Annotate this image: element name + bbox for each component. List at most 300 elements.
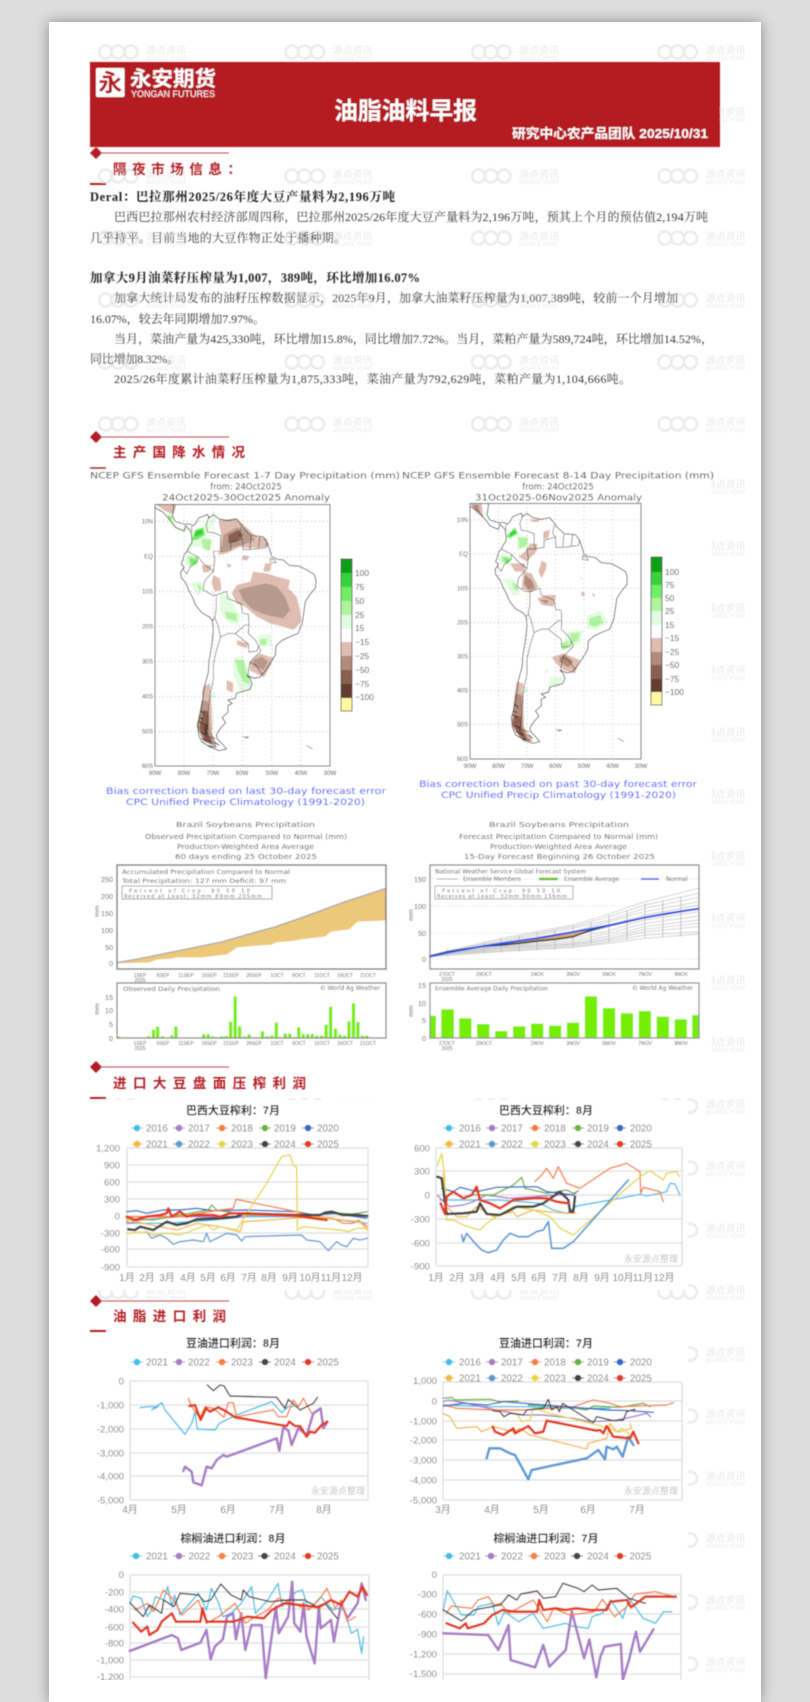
legend: 2017 bbox=[188, 1124, 210, 1134]
icon: Yongan logo: 永 bbox=[98, 70, 122, 97]
text block: Canada canola crush: 2025/26年度累计油菜籽压榨量为1,875,333吨，菜油产量为792,629吨，菜粕产量为1,104,666吨。 bbox=[114, 371, 631, 386]
plot: 11月 bbox=[321, 1272, 341, 1284]
chart title: 棕榈油进口利润：8月 bbox=[180, 1531, 286, 1545]
colour legend: −100 bbox=[665, 687, 684, 697]
chart: map 8-14 day precipitation anomaly bbox=[402, 470, 714, 800]
plot: -5,000 bbox=[97, 1496, 124, 1506]
legend: 2025 bbox=[317, 1140, 339, 1150]
text block: Canada canola crush: 当月，菜油产量为425,330吨，环比增加15.8%，同比增加7.72%。当月，菜粕产量为589,724吨，环比增加14.52%， bbox=[114, 331, 713, 346]
plot: 5月 bbox=[171, 1504, 187, 1516]
ensemble lines: 3NOV bbox=[566, 972, 580, 978]
chart: palm oil import margin August bbox=[97, 1531, 369, 1683]
daily bars: 5NOV bbox=[602, 1041, 616, 1047]
plot: 3月 bbox=[435, 1504, 451, 1516]
company name: YONGAN FUTURES bbox=[131, 89, 215, 99]
plot: -2,000 bbox=[410, 1436, 437, 1446]
legend: 2018 bbox=[544, 1124, 566, 1134]
plot: -1,500 bbox=[410, 1669, 437, 1680]
legend: 2025 bbox=[630, 1552, 652, 1562]
daily bars: 11SEP bbox=[178, 1041, 194, 1047]
chart title: 豆油进口利润：7月 bbox=[499, 1336, 593, 1350]
legend: 2016 bbox=[459, 1124, 481, 1134]
text block: Deral Parana soybean: Deral：巴拉那州2025/26年度大豆产量料为2,196万吨 bbox=[90, 189, 395, 204]
daily bars: 16OCT bbox=[337, 1041, 353, 1047]
legend: 2023 bbox=[232, 1552, 254, 1562]
accumulated area: 150 bbox=[101, 909, 113, 918]
colour legend bbox=[651, 557, 684, 705]
chart: map 1-7 day precipitation anomaly bbox=[90, 470, 400, 807]
accumulated area: Total Precipitation: 127 mm Deficit: 97 mm bbox=[121, 878, 286, 885]
plot: -600 bbox=[101, 1244, 120, 1256]
axis labels: EQ bbox=[144, 554, 153, 560]
legend bbox=[131, 1124, 339, 1150]
axis labels: 30W bbox=[324, 770, 337, 777]
chart: soybean oil import margin July bbox=[410, 1336, 682, 1516]
plot: -1,000 bbox=[410, 1416, 437, 1428]
chart titles bbox=[459, 820, 658, 861]
map title: 24Oct2025-30Oct2025 Anomaly bbox=[162, 492, 330, 502]
plot: 永安源点整理 bbox=[624, 1253, 678, 1264]
section heading: overnight market news: 隔夜市场信息： bbox=[113, 161, 241, 177]
ensemble lines: National Weather Service Global Forecast System bbox=[435, 868, 586, 876]
plot: -2,000 bbox=[97, 1424, 124, 1436]
daily bars: 26SEP bbox=[246, 1041, 262, 1047]
axis labels: 90W bbox=[464, 763, 477, 770]
accumulated area: 2025 bbox=[134, 978, 146, 984]
colour legend: 50 bbox=[355, 596, 365, 606]
daily bars: 7NOV bbox=[638, 1041, 652, 1047]
legend: 2023 bbox=[231, 1140, 253, 1150]
ensemble lines: 5NOV bbox=[602, 972, 616, 978]
accumulated area: Percent of Crop: 90 50 10 bbox=[129, 888, 250, 894]
plot: -900 bbox=[101, 1262, 120, 1274]
daily bars: 15 bbox=[418, 981, 426, 990]
map title: NCEP GFS Ensemble Forecast 1-7 Day Precipitation (mm) bbox=[90, 470, 400, 480]
axis labels: 40S bbox=[142, 694, 153, 700]
axis labels: 10N bbox=[457, 517, 468, 524]
colour legend: −15 bbox=[665, 633, 680, 643]
legend bbox=[130, 1552, 339, 1562]
plot: -800 bbox=[105, 1638, 124, 1650]
legend: 2022 bbox=[188, 1358, 210, 1368]
plot: 600 bbox=[414, 1144, 430, 1154]
accumulated area: 6SEP bbox=[157, 973, 170, 979]
daily bars bbox=[94, 983, 386, 1052]
map title: 31Oct2025-06Nov2025 Anomaly bbox=[475, 492, 642, 502]
map title: from: 24Oct2025 bbox=[210, 482, 282, 492]
plot: -200 bbox=[105, 1588, 124, 1598]
text block: Canada canola crush: 加拿大9月油菜籽压榨量为1,007，389吨，环比增加16.07% bbox=[90, 270, 420, 285]
plot: 5月 bbox=[200, 1272, 216, 1284]
daily bars: 5 bbox=[422, 1016, 426, 1025]
daily bars: 21OCT bbox=[360, 1041, 376, 1047]
axis labels: 30S bbox=[457, 654, 468, 660]
plot: 9月 bbox=[282, 1272, 298, 1284]
plot: 0 bbox=[119, 1570, 124, 1581]
plot: 永安源点整理 bbox=[311, 1485, 365, 1496]
plot: 1,200 bbox=[96, 1144, 120, 1154]
plot: -600 bbox=[411, 1238, 430, 1250]
axis labels: EQ bbox=[459, 551, 468, 558]
text block: Canada canola crush: 16.07%，较去年同期增加7.97%。 bbox=[90, 311, 265, 326]
legend: 2025 bbox=[317, 1552, 339, 1562]
accumulated area: 16SEP bbox=[201, 973, 217, 979]
axis labels: 60S bbox=[457, 756, 468, 763]
plot: 4月 bbox=[180, 1272, 196, 1284]
plot: 0 bbox=[119, 1376, 124, 1388]
chart title: 巴西大豆榨利：8月 bbox=[499, 1103, 593, 1117]
chart titles: Production-Weighted Area Average bbox=[490, 842, 628, 851]
daily bars: © World Ag Weather bbox=[320, 985, 381, 992]
plot: -1,200 bbox=[410, 1650, 437, 1660]
section heading: precipitation: 主产国降水情况 bbox=[113, 444, 246, 460]
plot: 4月 bbox=[122, 1504, 138, 1516]
text block: Canada canola crush: 同比增加8.32%。 bbox=[90, 351, 179, 366]
map title bbox=[402, 470, 714, 502]
plot: 900 bbox=[104, 1160, 120, 1172]
ensemble lines: 150 bbox=[414, 875, 426, 884]
legend: 2018 bbox=[544, 1358, 566, 1368]
map title: NCEP GFS Ensemble Forecast 8-14 Day Precipitation (mm) bbox=[402, 470, 714, 480]
colour legend: 25 bbox=[355, 610, 365, 620]
legend: 2023 bbox=[544, 1140, 566, 1150]
plot bbox=[96, 1144, 368, 1284]
chart titles: Observed Precipitation Compared to Normal (mm) bbox=[145, 832, 347, 841]
map title bbox=[90, 470, 400, 502]
plot bbox=[97, 1570, 369, 1683]
legend: 2024 bbox=[587, 1140, 609, 1150]
chart titles: Brazil Soybeans Precipitation bbox=[176, 820, 315, 829]
legend: 2022 bbox=[188, 1552, 210, 1562]
daily bars: 2025 bbox=[441, 1046, 453, 1052]
map note: CPC Unified Precip Climatology (1991-2020) bbox=[126, 797, 365, 807]
ensemble lines: mm bbox=[408, 909, 415, 921]
plot: 3月 bbox=[159, 1272, 175, 1284]
legend: 2020 bbox=[630, 1124, 652, 1134]
ensemble lines: Normal bbox=[666, 876, 688, 883]
plot: 12月 bbox=[341, 1272, 363, 1284]
colour legend: −100 bbox=[355, 692, 374, 702]
legend: 2021 bbox=[146, 1358, 168, 1368]
daily bars: 10 bbox=[418, 999, 426, 1008]
axis labels bbox=[142, 518, 337, 777]
plot: 12月 bbox=[653, 1272, 675, 1284]
daily bars: 29OCT bbox=[476, 1041, 492, 1047]
ensemble lines bbox=[408, 865, 699, 983]
legend: 2018 bbox=[231, 1124, 253, 1134]
plot: -4,000 bbox=[97, 1472, 124, 1482]
colour legend: 100 bbox=[665, 567, 679, 577]
section heading: import soybean crush margin bbox=[90, 1061, 306, 1099]
ensemble lines: 29OCT bbox=[476, 972, 492, 978]
legend: 2025 bbox=[317, 1358, 339, 1368]
plot: 4月 bbox=[484, 1504, 500, 1516]
plot: 300 bbox=[414, 1166, 430, 1178]
colour legend: 75 bbox=[355, 582, 365, 592]
axis labels: 80W bbox=[492, 763, 505, 770]
accumulated area: Received at Least: 32mm 89mm 205mm bbox=[124, 894, 262, 900]
daily bars: 9NOV bbox=[674, 1041, 688, 1047]
ensemble lines: 9NOV bbox=[674, 972, 688, 978]
axis labels: 30W bbox=[635, 763, 648, 770]
legend: 2022 bbox=[188, 1140, 210, 1150]
plot: 6月 bbox=[580, 1504, 596, 1516]
legend: 2022 bbox=[501, 1552, 523, 1562]
plot bbox=[410, 1376, 682, 1516]
colour legend: 15 bbox=[665, 620, 675, 630]
axis labels: 20S bbox=[142, 624, 153, 630]
chart title: 巴西大豆榨利：7月 bbox=[186, 1103, 280, 1117]
daily bars: 1OCT bbox=[270, 1041, 284, 1047]
ensemble lines: 50 bbox=[418, 929, 426, 938]
accumulated area: 1SEP bbox=[134, 973, 147, 979]
plot: 300 bbox=[104, 1194, 120, 1206]
accumulated area: 11OCT bbox=[314, 973, 330, 979]
colour legend: −25 bbox=[355, 651, 370, 661]
text block: Deral Parana soybean: 几乎持平。目前当地的大豆作物正处于播种期。 bbox=[90, 230, 346, 245]
plot: 6月 bbox=[531, 1272, 547, 1284]
legend: 2020 bbox=[317, 1124, 339, 1134]
colour legend: −50 bbox=[355, 665, 370, 675]
accumulated area: 200 bbox=[101, 892, 113, 901]
title: 油脂油料早报 bbox=[334, 98, 477, 125]
plot: 10月 bbox=[612, 1272, 634, 1284]
axis labels: 80W bbox=[178, 770, 191, 777]
axis labels: 10S bbox=[142, 588, 153, 596]
axis labels: 70W bbox=[521, 763, 534, 770]
map note: Bias correction based on past 30-day forecast error bbox=[419, 779, 698, 789]
daily bars: Ensemble Average Daily Precipitation bbox=[435, 986, 548, 992]
plot: -600 bbox=[418, 1610, 437, 1620]
ensemble lines: Percent of Crop: 90 50 10 bbox=[442, 888, 560, 894]
daily bars: 5 bbox=[109, 1020, 113, 1029]
chart: Brazil soybean crush August bbox=[411, 1103, 682, 1284]
axis labels: 90W bbox=[149, 770, 162, 777]
ensemble lines: 27OCT bbox=[439, 972, 455, 978]
legend: 2022 bbox=[501, 1140, 523, 1150]
plot: 11月 bbox=[633, 1272, 653, 1284]
legend: 2021 bbox=[146, 1552, 168, 1562]
team and date: 研究中心农产品团队 2025/10/31 bbox=[512, 126, 708, 141]
chart titles: 60 days ending 25 October 2025 bbox=[175, 852, 317, 861]
chart titles: Brazil Soybeans Precipitation bbox=[489, 820, 629, 829]
plot: 0 bbox=[432, 1396, 437, 1408]
daily bars: 15 bbox=[105, 993, 113, 1002]
accumulated area: 11SEP bbox=[178, 973, 194, 979]
accumulated area: 1OCT bbox=[270, 973, 284, 979]
daily bars: 10 bbox=[105, 1006, 113, 1015]
legend: 2019 bbox=[274, 1124, 296, 1134]
colour legend: 100 bbox=[355, 568, 369, 578]
axis labels: 20S bbox=[457, 620, 468, 626]
accumulated area: 21SEP bbox=[223, 973, 239, 979]
section heading: precipitation bbox=[90, 431, 246, 469]
axis labels: 40S bbox=[457, 688, 468, 694]
map note bbox=[106, 786, 387, 807]
ensemble lines: 100 bbox=[414, 902, 426, 911]
accumulated area: 0 bbox=[109, 959, 113, 968]
daily bars: 0 bbox=[422, 1034, 426, 1043]
plot: -3,000 bbox=[97, 1448, 124, 1460]
plot: 2月 bbox=[139, 1272, 155, 1284]
plot: 7月 bbox=[552, 1272, 568, 1284]
plot bbox=[410, 1570, 681, 1680]
map title: from: 24Oct2025 bbox=[522, 482, 594, 492]
chart: soybean oil import margin August bbox=[97, 1336, 368, 1516]
plot: -400 bbox=[105, 1604, 124, 1616]
accumulated area: 16OCT bbox=[337, 973, 353, 979]
axis labels: 40W bbox=[606, 763, 619, 770]
colour legend: −25 bbox=[665, 647, 680, 657]
plot frame with graticule bbox=[470, 503, 641, 759]
plot bbox=[97, 1376, 368, 1516]
legend: 2017 bbox=[501, 1124, 523, 1134]
plot: 9月 bbox=[594, 1272, 610, 1284]
plot: 8月 bbox=[261, 1272, 277, 1284]
axis labels: 50S bbox=[457, 722, 468, 728]
daily bars: mm bbox=[94, 1003, 101, 1015]
header banner bbox=[90, 62, 720, 147]
chart titles: Production-Weighted Area Average bbox=[177, 842, 315, 851]
colour legend bbox=[341, 559, 374, 711]
legend: 2016 bbox=[146, 1124, 168, 1134]
plot: -300 bbox=[418, 1590, 437, 1600]
daily bars: 6OCT bbox=[292, 1041, 306, 1047]
legend bbox=[443, 1124, 652, 1150]
colour legend: −75 bbox=[355, 679, 370, 689]
axis labels: 40W bbox=[295, 770, 308, 777]
plot: -1,000 bbox=[97, 1656, 124, 1666]
chart titles: 15-Day Forecast Beginning 26 October 2025 bbox=[464, 852, 655, 861]
daily bars: 27OCT bbox=[439, 1041, 455, 1047]
plot: 0 bbox=[425, 1190, 430, 1202]
legend: 2024 bbox=[587, 1552, 609, 1562]
legend bbox=[443, 1358, 652, 1384]
ensemble lines: 1NOV bbox=[530, 972, 544, 978]
section heading: oil import margin: 油脂进口利润 bbox=[113, 1308, 226, 1324]
daily bars: mm bbox=[408, 1005, 415, 1017]
legend: 2023 bbox=[544, 1552, 566, 1562]
legend: 2019 bbox=[587, 1358, 609, 1368]
legend: 2017 bbox=[501, 1358, 523, 1368]
plot: 10月 bbox=[299, 1272, 321, 1284]
chart titles: Forecast Precipitation Compared to Normal (mm) bbox=[459, 832, 658, 841]
plot: 7月 bbox=[629, 1504, 645, 1516]
company name: 永安期货 bbox=[130, 67, 216, 91]
plot: 0 bbox=[432, 1570, 437, 1581]
axis labels: 70W bbox=[207, 770, 220, 777]
accumulated area: Accumulated Precipitation Compared to Normal bbox=[122, 869, 290, 876]
axis labels bbox=[457, 517, 648, 770]
accumulated area bbox=[94, 865, 386, 984]
plot: 2月 bbox=[449, 1272, 465, 1284]
plot: -600 bbox=[105, 1622, 124, 1634]
plot: 3月 bbox=[469, 1272, 485, 1284]
legend: 2021 bbox=[459, 1552, 481, 1562]
text block: Deral Parana soybean: 巴西巴拉那州农村经济部周四称，巴拉那州2025/26年度大豆产量料为2,196万吨，预其上个月的预估值2,194万吨 bbox=[114, 209, 708, 224]
axis labels: 50W bbox=[578, 763, 591, 770]
accumulated area: 21OCT bbox=[360, 973, 376, 979]
colour legend: −50 bbox=[665, 660, 680, 670]
legend: 2021 bbox=[146, 1140, 168, 1150]
axis labels: 60S bbox=[142, 763, 153, 770]
text block: Deral Parana soybean bbox=[90, 189, 708, 245]
plot: -300 bbox=[411, 1214, 430, 1226]
ensemble lines: Receives at Least: 32mm 90mm 156mm bbox=[437, 894, 567, 900]
text block: Canada canola crush: 加拿大统计局发布的油籽压榨数据显示，2025年9月，加拿大油菜籽压榨量为1,007,389吨，较前一个月增加 bbox=[114, 290, 678, 305]
chart title: 棕榈油进口利润：7月 bbox=[493, 1531, 599, 1545]
legend: 2025 bbox=[630, 1140, 652, 1150]
daily bars: © World Ag Weather bbox=[632, 985, 694, 992]
map note: CPC Unified Precip Climatology (1991-2020) bbox=[441, 790, 676, 800]
plot: 1月 bbox=[428, 1272, 444, 1284]
daily bars: 16SEP bbox=[201, 1041, 217, 1047]
plot: 8月 bbox=[316, 1504, 332, 1516]
legend: 2021 bbox=[459, 1140, 481, 1150]
daily bars: 6SEP bbox=[157, 1041, 170, 1047]
legend bbox=[131, 1358, 339, 1368]
plot: 6月 bbox=[220, 1504, 236, 1516]
legend: 2023 bbox=[231, 1358, 253, 1368]
legend: 2021 bbox=[459, 1374, 481, 1384]
axis labels: 50S bbox=[142, 728, 153, 736]
daily bars: 2025 bbox=[134, 1046, 146, 1052]
axis labels: 60W bbox=[549, 763, 562, 770]
legend bbox=[443, 1552, 652, 1562]
daily bars: 3NOV bbox=[566, 1041, 580, 1047]
legend: 2016 bbox=[459, 1358, 481, 1368]
plot: -900 bbox=[411, 1262, 430, 1272]
section heading: import soybean crush margin: 进口大豆盘面压榨利润 bbox=[113, 1075, 306, 1091]
colour legend: −75 bbox=[665, 674, 680, 684]
legend: 2025 bbox=[630, 1374, 652, 1384]
legend: 2023 bbox=[544, 1374, 566, 1384]
axis labels: 10N bbox=[142, 518, 153, 526]
axis labels: 30S bbox=[142, 658, 153, 666]
daily bars: 1NOV bbox=[530, 1041, 544, 1047]
chart titles bbox=[145, 820, 347, 861]
plot: 7月 bbox=[269, 1504, 285, 1516]
section heading: oil import margin bbox=[90, 1295, 229, 1332]
legend: 2024 bbox=[274, 1552, 296, 1562]
plot: -4,000 bbox=[410, 1476, 437, 1486]
colour legend: −15 bbox=[355, 637, 370, 647]
chart: Brazil forecast precipitation bbox=[408, 820, 699, 1052]
plot: 600 bbox=[104, 1178, 120, 1188]
plot: 6月 bbox=[220, 1272, 236, 1284]
legend: 2024 bbox=[587, 1374, 609, 1384]
accumulated area: 50 bbox=[105, 943, 113, 952]
plot frame with graticule bbox=[155, 504, 330, 766]
legend: 2024 bbox=[274, 1358, 296, 1368]
axis labels: 60W bbox=[236, 770, 249, 777]
plot: -5,000 bbox=[410, 1496, 437, 1506]
plot: 0 bbox=[115, 1212, 120, 1222]
colour legend: 25 bbox=[665, 606, 675, 616]
colour legend: 50 bbox=[665, 593, 675, 603]
legend: 2019 bbox=[587, 1124, 609, 1134]
colour legend: 15 bbox=[355, 623, 365, 633]
plot: 4月 bbox=[490, 1272, 506, 1284]
colour legend: 75 bbox=[665, 580, 675, 590]
daily bars: Observed Daily Precipitation bbox=[123, 986, 220, 993]
axis labels: 50W bbox=[266, 770, 279, 777]
accumulated area: 100 bbox=[101, 926, 113, 935]
plot: -1,000 bbox=[97, 1400, 124, 1412]
daily bars bbox=[408, 981, 699, 1052]
plot: 1月 bbox=[119, 1272, 135, 1284]
daily bars: 1SEP bbox=[134, 1041, 147, 1047]
